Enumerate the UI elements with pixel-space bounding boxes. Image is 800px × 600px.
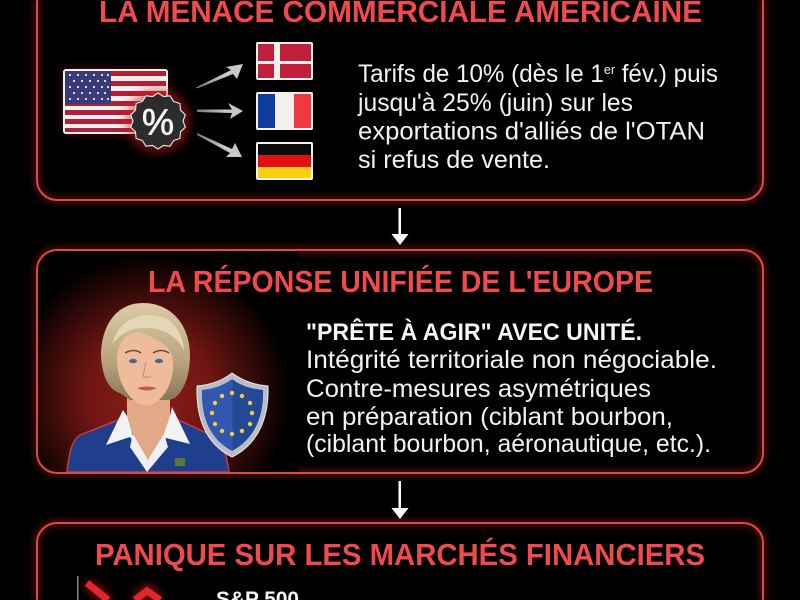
text: prête à agir: (ciblant bourbon, aéronautique, etc.). <box>306 430 711 458</box>
arrow: panel 1 to panel 2 <box>392 208 408 245</box>
text: tarifs <box>357 60 718 174</box>
heading: réponse: LA RÉPONSE UNIFIÉE DE L'EUROPE <box>148 264 653 299</box>
panel: la réponse unifiée de l'Europe <box>37 250 763 473</box>
background glow behind portrait <box>38 251 298 472</box>
arrow: panel 2 to panel 3 <box>392 481 408 519</box>
text: prête à agir: Intégrité territoriale non négociable. <box>306 346 717 374</box>
text: tarifs: jusqu'à 25% (juin) sur les <box>357 89 633 117</box>
text: tarifs: fév.) puis <box>615 60 718 88</box>
text: tarifs: er <box>604 62 616 77</box>
portrait: woman in blue jacket <box>67 303 229 472</box>
icon: Germany flag <box>256 142 313 180</box>
heading: panique: PANIQUE SUR LES MARCHÉS FINANCIERS <box>95 537 705 572</box>
chart: falling market line <box>77 576 160 600</box>
icon: percent badge: % <box>142 102 174 142</box>
icon: France flag <box>256 92 313 130</box>
text: prête à agir: Contre-mesures asymétriques <box>306 375 651 403</box>
arrow: to Germany <box>197 133 242 157</box>
text: prête à agir: "PRÊTE À AGIR" AVEC UNITÉ. <box>306 318 642 346</box>
arrow: to France <box>197 103 243 119</box>
icon: US flag with percent badge <box>63 69 190 153</box>
icon: Denmark flag <box>256 42 313 80</box>
arrow: to Denmark <box>196 64 243 88</box>
icon: EU shield <box>197 373 268 457</box>
text: tarifs: Tarifs de 10% (dès le 1 <box>358 60 612 88</box>
text: tarifs: si refus de vente. <box>358 146 550 174</box>
panel: panique sur les marchés financiers <box>37 523 763 600</box>
text: prête à agir: en préparation (ciblant bourbon, <box>306 403 673 431</box>
text: tarifs: exportations d'alliés de l'OTAN <box>358 118 705 146</box>
panel: la menace commerciale américaine <box>37 0 763 200</box>
text: prête à agir <box>306 318 717 458</box>
